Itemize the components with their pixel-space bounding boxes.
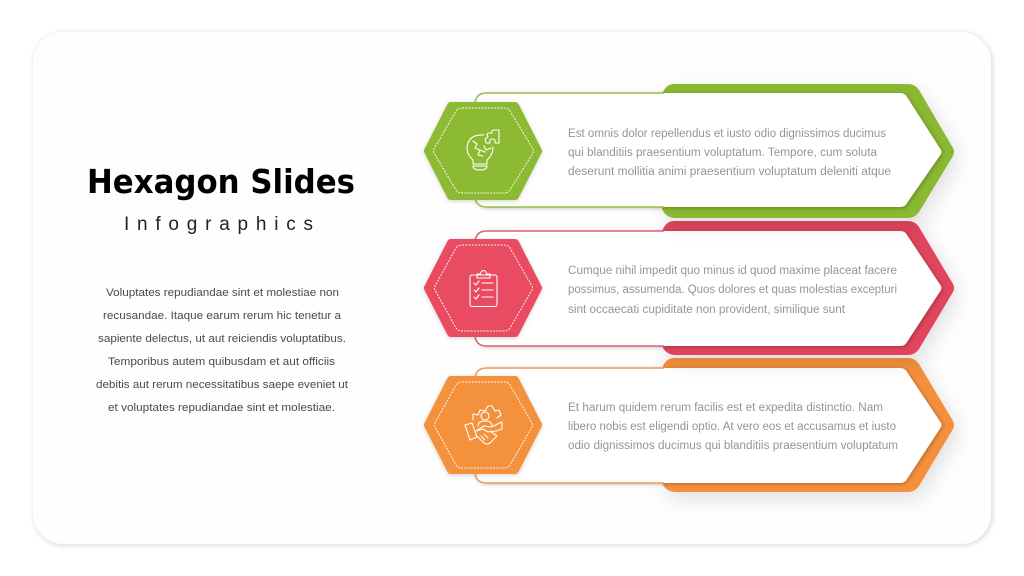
text block: left description (96, 287, 348, 414)
panel: green row (428, 84, 954, 218)
icon: handshake and gear (465, 406, 502, 444)
heading: title: Hexagon Slides (87, 162, 355, 201)
orange outer arrow band (662, 358, 954, 492)
text block: left description: sapiente delectus, ut aut reiciendis voluptatibus. (98, 333, 346, 345)
green outer arrow band (662, 84, 954, 218)
orange thin outline (475, 368, 664, 483)
text block: orange: libero nobis est eligendi optio. At vero eos et accusamus et iusto (568, 421, 896, 433)
orange hexagon (428, 380, 538, 470)
green thin outline (475, 93, 664, 207)
text block: red: sint occaecati cupiditate non provident, similique sunt (568, 304, 846, 316)
red thin outline (475, 231, 664, 346)
orange white content shape (475, 368, 942, 483)
heading: subtitle: Infographics (124, 214, 313, 235)
red white content shape (475, 231, 942, 346)
text block: left description: Temporibus autem quibusdam et aut officiis (108, 356, 336, 368)
text block: green: qui blanditiis praesentium voluptatum. Tempore, cum soluta (568, 147, 878, 159)
text block: green (568, 128, 891, 178)
text block: red: Cumque nihil impedit quo minus id quod maxime placeat facere (568, 265, 897, 277)
text block: left description: et voluptates repudiandae sint et molestiae. (108, 402, 335, 414)
green hexagon (428, 106, 538, 196)
text block: orange: odio dignissimos ducimus qui blanditiis praesentium voluptatum (568, 440, 898, 452)
text block: green: Est omnis dolor repellendus et iusto odio dignissimos ducimus (568, 128, 886, 140)
icon: lightbulb with puzzle piece (467, 130, 499, 170)
text block: left description: Voluptates repudiandae sint et molestiae non (106, 287, 339, 299)
text block: orange (568, 402, 898, 452)
panel: red row (428, 221, 954, 355)
text block: left description: debitis aut rerum necessitatibus saepe eveniet ut (96, 379, 348, 391)
text block: red (568, 265, 897, 316)
icon: clipboard checklist (470, 270, 497, 306)
text block: red: possimus, assumenda. Quos dolores et quas molestias excepturi (568, 284, 897, 296)
panel: orange row (428, 358, 954, 492)
red hexagon (428, 243, 538, 333)
text block: left description: recusandae. Itaque earum rerum hic tenetur a (103, 310, 342, 322)
text block: green: deserunt mollitia animi praesentium voluptatum deleniti atque (568, 166, 891, 178)
red outer arrow band (662, 221, 954, 355)
text block: orange: Et harum quidem rerum facilis est et expedita distinctio. Nam (568, 402, 883, 414)
green white content shape (475, 93, 942, 207)
